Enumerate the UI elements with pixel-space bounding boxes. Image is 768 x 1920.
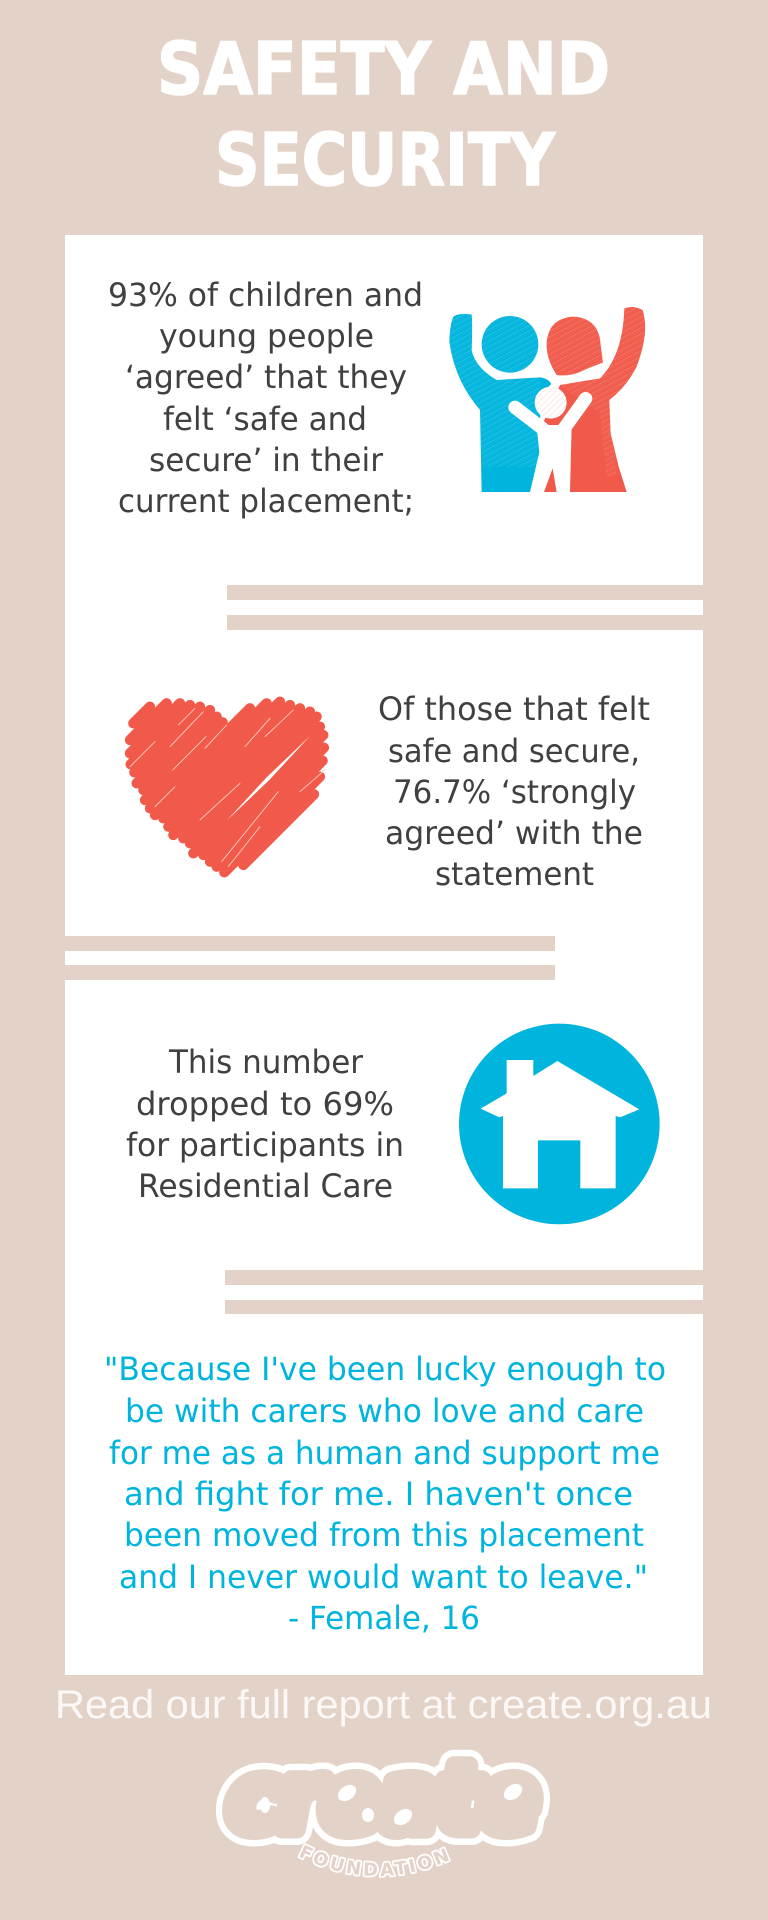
icon part: red adult <box>540 307 645 492</box>
quote: be with carers who love and care <box>125 1392 644 1430</box>
text block: 93% felt safe <box>108 276 423 520</box>
text block: 93% felt safe: current placement; <box>118 482 414 520</box>
text block: 93% felt safe: secure’ in their <box>149 441 384 479</box>
title: SECURITY <box>215 118 556 202</box>
title <box>157 27 610 202</box>
text block: 93% felt safe: 93% of children and <box>108 276 423 314</box>
text block: residential care: Residential Care <box>138 1167 393 1205</box>
text block: residential care <box>126 1043 404 1205</box>
text block: 93% felt safe: felt ‘safe and <box>163 400 367 438</box>
text block: strongly agreed: agreed’ with the <box>385 814 643 852</box>
icon: scribbled red heart <box>130 702 325 872</box>
text block: 93% felt safe: young people <box>159 317 374 355</box>
title: SAFETY AND <box>157 27 610 111</box>
text block: strongly agreed: Of those that felt <box>378 690 650 728</box>
quote: and fight for me. I haven't once <box>124 1475 633 1513</box>
icon part: white child <box>515 387 586 492</box>
icon: house in blue circle <box>459 1024 660 1224</box>
icon: family with raised arms <box>449 307 645 492</box>
panel: white content card <box>65 235 703 1675</box>
text block: residential care: for participants in <box>126 1126 404 1164</box>
text block: residential care: This number <box>168 1043 364 1081</box>
quote <box>104 1350 666 1637</box>
text block: strongly agreed: statement <box>435 855 594 893</box>
footer: report link: Read our full report at create.org.au <box>55 1683 712 1727</box>
text block: 93% felt safe: ‘agreed’ that they <box>125 358 407 396</box>
quote: and I never would want to leave." <box>119 1558 648 1596</box>
text block: residential care: dropped to 69% <box>136 1085 394 1123</box>
text block: strongly agreed: 76.7% ‘strongly <box>393 773 636 811</box>
icon part: blue adult <box>449 314 551 492</box>
logo: create foundation: create <box>228 1746 538 1851</box>
icon part: chalk hatching <box>449 307 645 477</box>
quote: "Because I've been lucky enough to <box>104 1350 666 1388</box>
logo: create foundation: FOUNDATION <box>298 1843 451 1878</box>
text block: strongly agreed <box>378 690 650 893</box>
quote: for me as a human and support me <box>109 1434 660 1472</box>
text block: strongly agreed: safe and secure, <box>388 732 640 770</box>
quote: been moved from this placement <box>124 1516 644 1554</box>
logo: create foundation: create <box>228 1746 538 1851</box>
quote: - Female, 16 <box>288 1599 480 1637</box>
